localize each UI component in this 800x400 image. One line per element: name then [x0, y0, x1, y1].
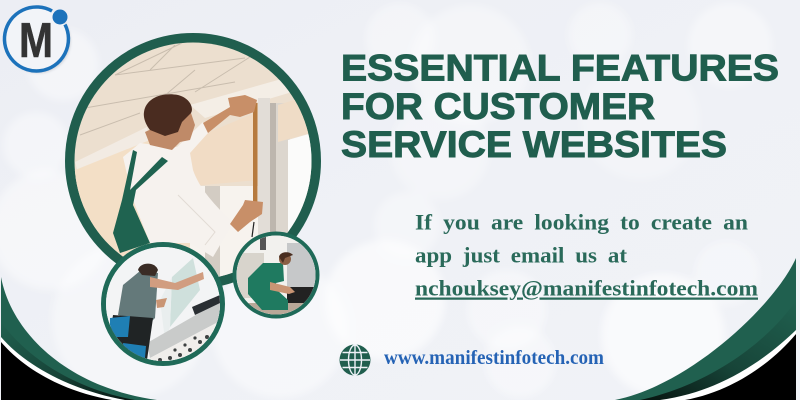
worker arm	[270, 282, 295, 294]
worker head	[279, 256, 291, 265]
tertiary photo circle: worker kneeling	[234, 233, 319, 318]
window frames	[258, 98, 270, 236]
title line 1: ESSENTIAL FEATURES	[341, 46, 779, 88]
head	[138, 264, 158, 276]
lattice radiator	[150, 322, 217, 361]
raised arm and hand	[203, 95, 257, 133]
title line 2: FOR CUSTOMER	[341, 85, 655, 127]
secondary photo circle: worker at window	[100, 244, 230, 370]
bottom-left swoosh	[1, 277, 157, 400]
worker body	[248, 263, 288, 310]
logo ring	[4, 7, 68, 71]
website url: www.manifestinfotech.com	[384, 348, 604, 369]
title	[341, 46, 779, 165]
hand	[156, 298, 167, 308]
wall	[74, 140, 190, 256]
blind	[190, 114, 253, 185]
green overall straps and bib	[113, 150, 168, 253]
contact text block	[415, 210, 758, 302]
logo	[4, 7, 70, 73]
neck and face	[145, 110, 195, 150]
logo letter M: M	[19, 14, 53, 68]
icon: globe	[340, 344, 370, 376]
lower arm and hand	[230, 200, 263, 232]
logo dot	[52, 10, 68, 24]
title line 3: SERVICE WEBSITES	[341, 123, 727, 165]
ceiling	[70, 40, 320, 280]
contact line 2: app just email us at	[415, 242, 628, 268]
tool	[192, 295, 220, 315]
hair	[144, 94, 192, 136]
white shirt	[123, 122, 220, 257]
arm	[150, 272, 204, 290]
bottom-right swoosh	[615, 258, 796, 400]
torso	[118, 271, 158, 323]
email address: nchouksey@manifestinfotech.com	[415, 276, 758, 302]
window	[170, 258, 200, 327]
contact line 1: If you are looking to create an	[415, 210, 748, 234]
measuring tape	[253, 103, 258, 203]
apron	[108, 315, 153, 360]
window below blind	[190, 186, 258, 277]
worker figure	[113, 94, 263, 257]
sill	[147, 300, 222, 358]
blue trousers	[110, 316, 130, 337]
cornice beam	[190, 78, 292, 118]
main photo circle: man measuring window	[70, 38, 320, 284]
